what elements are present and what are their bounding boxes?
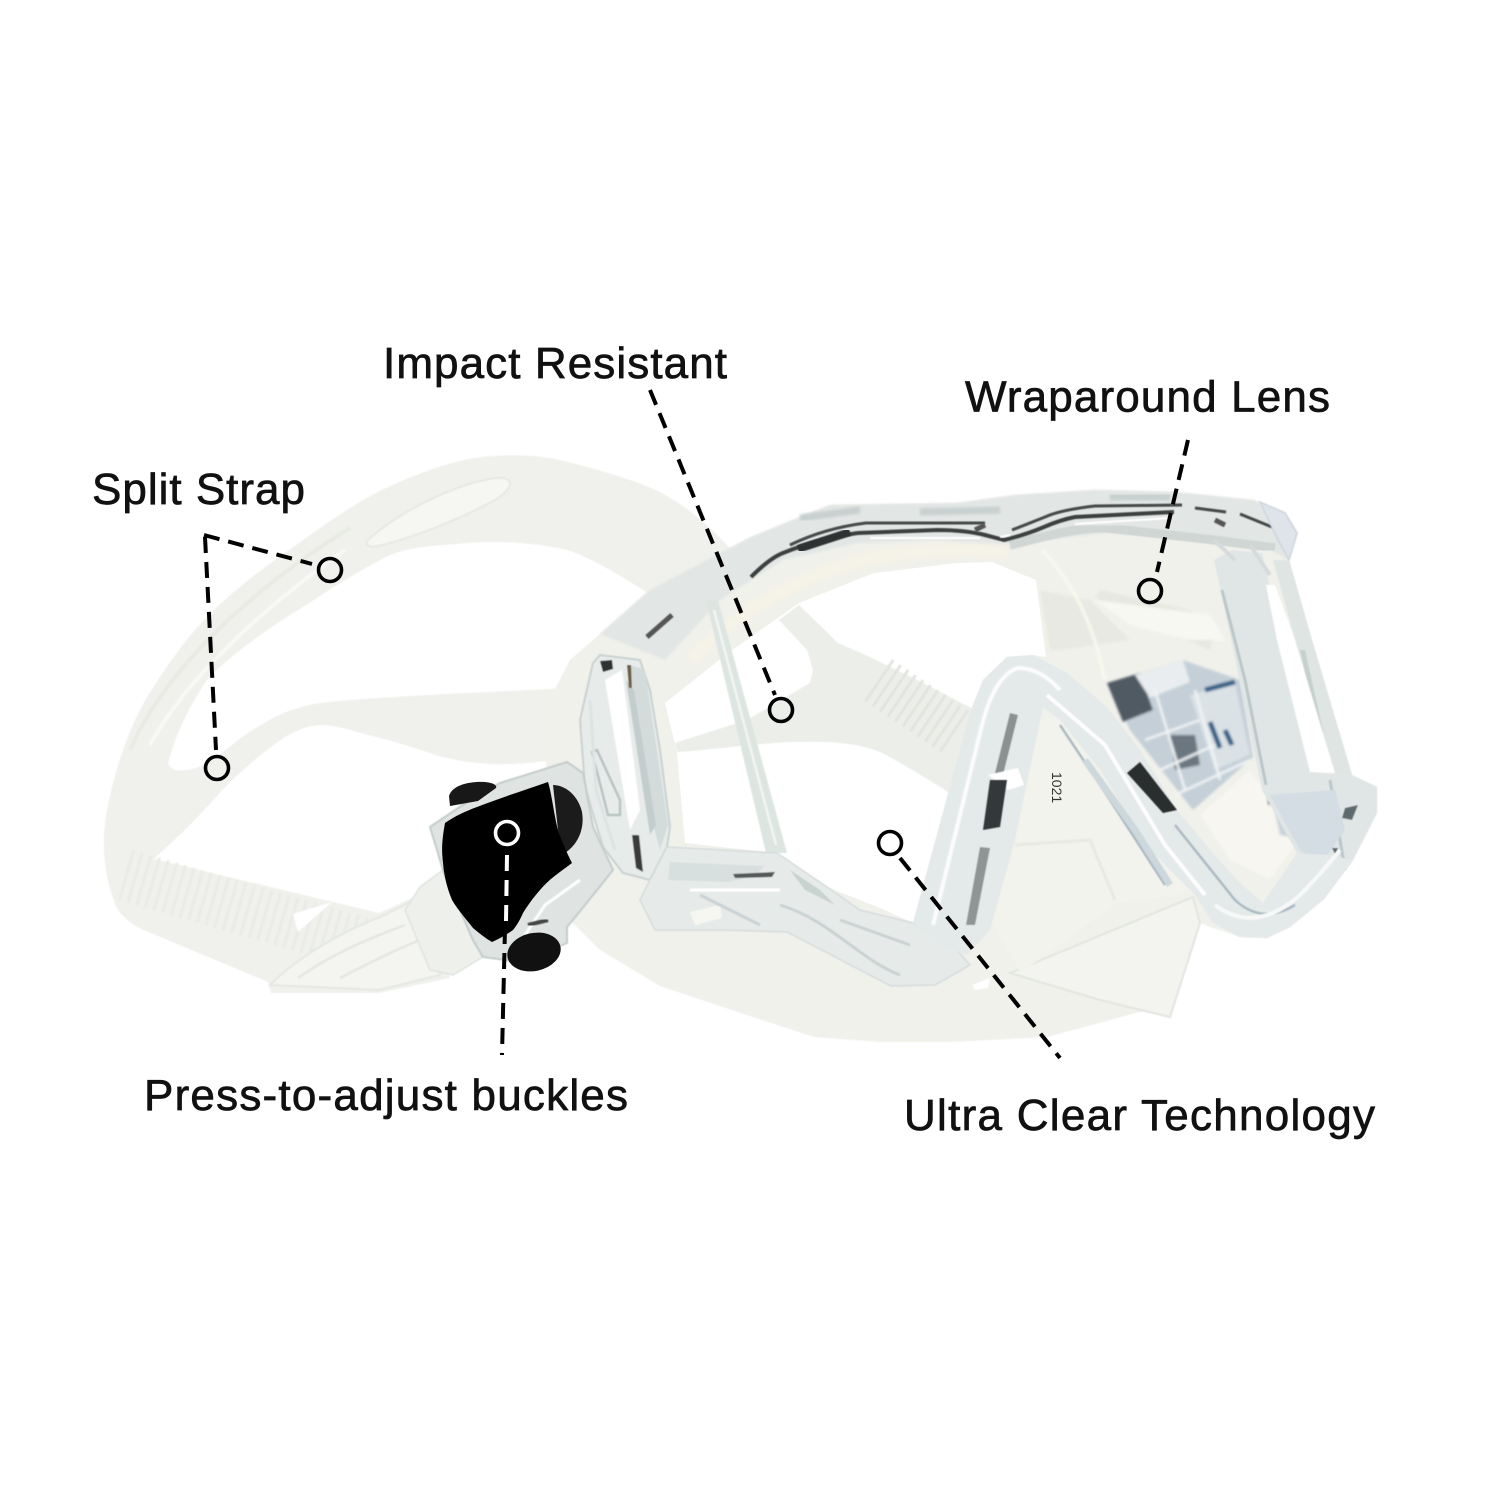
marker lower <box>206 756 228 780</box>
split strap <box>104 455 740 993</box>
marker <box>878 832 902 854</box>
frame: nose bridge <box>913 655 1353 973</box>
marker upper <box>318 558 342 582</box>
heading text: Impact Resistant <box>383 339 727 388</box>
black buckle body <box>442 782 572 942</box>
dark streaks <box>995 713 1018 775</box>
nose inner triangle <box>993 715 1193 973</box>
black nose clips <box>983 762 1177 830</box>
glass panel edge <box>706 600 787 853</box>
diving mask illustration <box>104 455 1377 1042</box>
leader line <box>900 858 1060 1058</box>
dark rear disc <box>553 785 583 853</box>
leader line over buckle <box>506 855 507 921</box>
grey inner rim <box>1010 528 1275 548</box>
heading text: Press-to-adjust buckles <box>144 1071 628 1120</box>
strip outside the sliver <box>1273 560 1352 775</box>
frame code number: 1021 <box>1049 772 1065 803</box>
label: press-to-adjust buckles <box>144 822 628 1120</box>
left leg and apex <box>913 655 1353 955</box>
inner lens panel shading <box>1040 550 1225 680</box>
leader line to lower strap <box>205 537 216 750</box>
back strap seen through lens <box>675 605 985 800</box>
leader line <box>1157 440 1188 572</box>
marker <box>770 698 792 722</box>
label: split strap <box>92 465 342 780</box>
marker <box>1138 580 1162 602</box>
heading text: Wraparound Lens <box>965 372 1330 422</box>
main lens opening <box>665 562 1046 923</box>
frame: bottom-left block <box>640 847 970 986</box>
label: ultra clear technology <box>878 832 1375 1140</box>
frame: left column <box>580 655 670 880</box>
heading text: Split Strap <box>92 465 305 514</box>
buckle <box>405 762 613 976</box>
heading text: Ultra Clear Technology <box>904 1091 1375 1140</box>
strap neck <box>405 870 483 975</box>
cream band below frame <box>690 550 1010 660</box>
dark frame streaks <box>751 512 1174 577</box>
marker <box>496 822 518 844</box>
right lens frame <box>1214 540 1377 900</box>
strap rib shading <box>125 875 385 950</box>
strap mechanism behind lens <box>1107 660 1325 880</box>
leader line to upper strap <box>204 535 312 564</box>
see-through holes <box>665 562 1046 923</box>
strap logo plate <box>366 478 510 547</box>
right sliver of white <box>1266 585 1335 773</box>
top knob <box>449 782 496 806</box>
mask skirt <box>546 490 1377 1042</box>
right leg highlights <box>1047 695 1205 895</box>
label: wraparound lens <box>965 372 1330 602</box>
leader line below buckle <box>502 928 505 1055</box>
bottom knob <box>504 928 564 976</box>
clear buckle housing <box>430 762 613 962</box>
label: impact resistant <box>383 339 792 722</box>
frame: top band <box>600 490 1297 660</box>
nose block <box>972 897 1200 1017</box>
leader line <box>650 390 775 695</box>
